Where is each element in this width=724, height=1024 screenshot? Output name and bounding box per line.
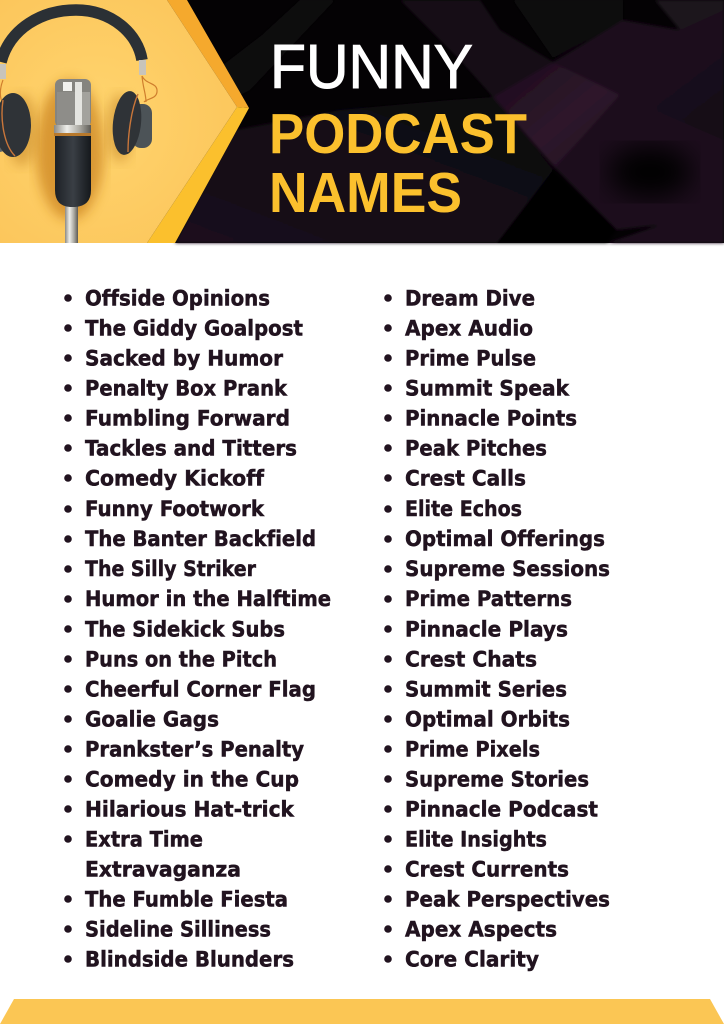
- right list: Prime Patterns: [405, 587, 572, 611]
- right ear cup: [110, 90, 152, 156]
- title: [269, 33, 527, 225]
- left list: Blindside Blunders: [85, 948, 294, 972]
- left list: Sacked by Humor: [85, 346, 284, 370]
- left list: The Giddy Goalpost: [85, 316, 303, 340]
- right list: Optimal Orbits: [405, 708, 570, 732]
- header banner: [0, 0, 724, 243]
- right list: Apex Audio: [405, 316, 533, 340]
- gold chevron border: [147, 0, 249, 243]
- right list: Core Clarity: [405, 948, 539, 972]
- mic body: [55, 136, 91, 207]
- left list: Comedy Kickoff: [85, 466, 265, 490]
- dark geometric background: [0, 0, 724, 243]
- right list: Crest Calls: [405, 466, 526, 490]
- right list: Supreme Stories: [405, 768, 589, 792]
- left list: Cheerful Corner Flag: [85, 678, 316, 702]
- right list: Pinnacle Points: [405, 406, 577, 430]
- right list: Dream Dive: [405, 286, 535, 310]
- right list: Crest Chats: [405, 648, 537, 672]
- left list: Extra Time: [85, 828, 203, 852]
- left list: Puns on the Pitch: [85, 648, 277, 672]
- right list: Optimal Offerings: [405, 527, 605, 551]
- left list: Comedy in the Cup: [85, 768, 299, 792]
- icon: headphones and microphone: [0, 10, 157, 243]
- left list: Hilarious Hat-trick: [85, 798, 295, 822]
- right list: Elite Insights: [405, 828, 547, 852]
- left list: Tackles and Titters: [85, 436, 297, 460]
- right list: [384, 286, 610, 972]
- right list: Peak Perspectives: [405, 888, 610, 912]
- title line: Funny: FUNNY: [270, 33, 473, 102]
- left list: Prankster’s Penalty: [85, 738, 304, 762]
- stem: [65, 205, 78, 243]
- left list: Humor in the Halftime: [85, 587, 331, 611]
- title line: Names: NAMES: [269, 161, 462, 225]
- left ear cup: [0, 93, 31, 157]
- left list: Funny Footwork: [85, 497, 265, 521]
- right list: Pinnacle Plays: [405, 618, 568, 642]
- right list: Crest Currents: [405, 858, 569, 882]
- right list: Supreme Sessions: [405, 557, 610, 581]
- left list: Fumbling Forward: [85, 406, 290, 430]
- right list: Prime Pixels: [405, 738, 540, 762]
- right list: Prime Pulse: [405, 346, 536, 370]
- left list: The Silly Striker: [85, 557, 257, 581]
- right list: Apex Aspects: [405, 918, 557, 942]
- headband: [1, 10, 142, 62]
- mic ring: [54, 125, 91, 133]
- right list: Summit Speak: [405, 376, 570, 400]
- left list: Penalty Box Prank: [85, 376, 288, 400]
- footer bar: [0, 999, 724, 1024]
- left list: The Fumble Fiesta: [85, 888, 288, 912]
- right list: Summit Series: [405, 678, 567, 702]
- mic grille: [55, 79, 91, 127]
- left list: Goalie Gags: [85, 708, 219, 732]
- left list: Offside Opinions: [85, 286, 270, 310]
- left list: The Sidekick Subs: [85, 618, 285, 642]
- left list: Extravaganza: [85, 858, 241, 882]
- left list: Sideline Silliness: [85, 918, 271, 942]
- title line: Podcast: PODCAST: [269, 102, 527, 166]
- left list: [64, 286, 331, 972]
- left list: The Banter Backfield: [85, 527, 316, 551]
- right list: Pinnacle Podcast: [405, 798, 598, 822]
- right list: Elite Echos: [405, 497, 522, 521]
- yellow photo panel: [0, 0, 237, 243]
- right list: Peak Pitches: [405, 436, 547, 460]
